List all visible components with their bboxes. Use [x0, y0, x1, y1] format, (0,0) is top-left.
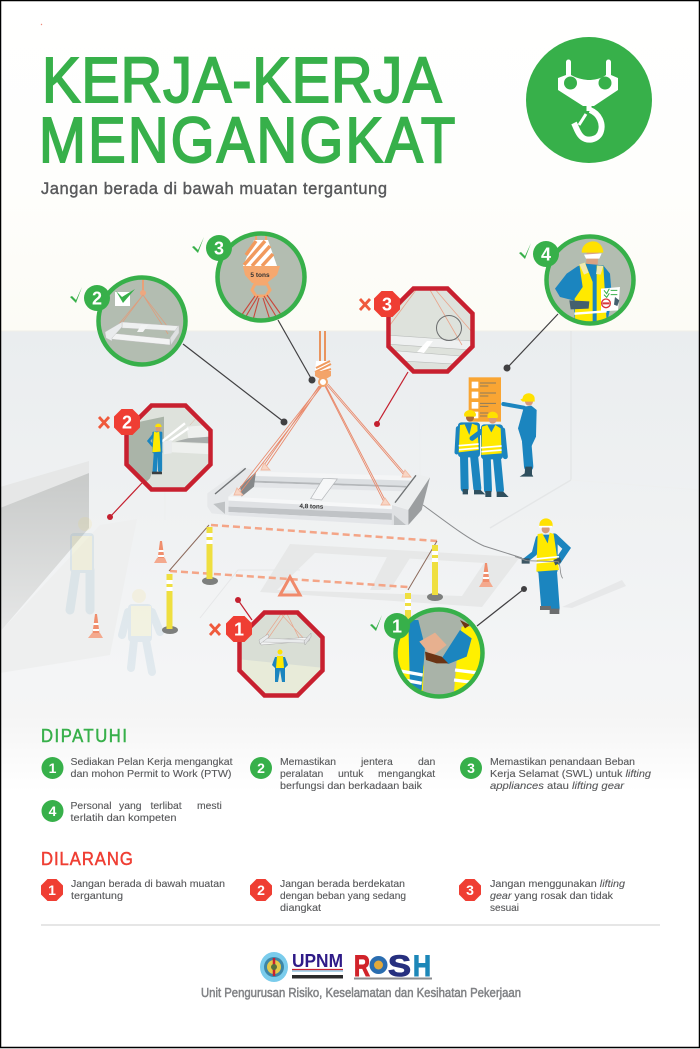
tick — [70, 287, 82, 303]
callout: green 4 — [519, 236, 634, 325]
connector: green 1 — [477, 586, 527, 626]
item: dipatuhi 3: Kerja Selamat (SWL) untuk lifting — [490, 769, 651, 780]
badge 1: 1 — [392, 616, 402, 636]
item: dilarang 1 — [41, 879, 225, 902]
item: dipatuhi 2: mengangkat — [378, 769, 435, 780]
tick — [192, 237, 204, 253]
item: dipatuhi 3: Memastikan penandaan Beban — [490, 757, 635, 768]
item: dipatuhi 4: mesti — [197, 801, 222, 812]
badge 3: 3 — [214, 238, 224, 258]
item: dilarang 1: Jangan berada di bawah muatan — [71, 879, 225, 890]
item: dilarang 2 — [250, 879, 406, 914]
item: dilarang 2: diangkat — [280, 903, 321, 914]
callout: red 1 — [210, 612, 325, 700]
load label: 4,8 tons — [299, 503, 324, 511]
callout: green 2 — [70, 276, 186, 364]
item: dilarang 3: sesuai — [490, 903, 519, 914]
item: dipatuhi 1: dan mohon Permit to Work (PTW) — [70, 769, 232, 780]
item: dipatuhi 3: appliances atau lifting gear — [490, 781, 625, 792]
callout: red 2 — [99, 406, 210, 490]
item: dilarang 3 — [459, 879, 625, 914]
item: dipatuhi 2: Memastikan — [280, 757, 336, 768]
connector: green 2 — [183, 344, 288, 426]
logo: ROSH — [354, 950, 432, 983]
item: dilarang 3: Jangan menggunakan lifting — [490, 879, 625, 890]
badge 3: 3 — [382, 294, 392, 314]
badge 2: 2 — [122, 412, 132, 432]
callout: red 3 — [360, 288, 472, 372]
connector: red 3 — [374, 372, 408, 427]
item: dilarang 3: 3 — [466, 882, 474, 898]
tick — [370, 615, 382, 631]
frame shadow on the floor — [200, 544, 626, 618]
icon: crane hook — [526, 37, 652, 163]
item: dilarang 2: 2 — [257, 882, 265, 898]
callout: green 3 — [192, 233, 304, 320]
item: dipatuhi 4: yang — [119, 801, 142, 812]
title: MENGANGKAT — [39, 104, 455, 176]
control wire — [423, 505, 522, 558]
item: dilarang 2: Jangan berada berdekatan — [280, 879, 405, 890]
title: KERJA-KERJA — [42, 44, 442, 116]
faded background workers — [70, 517, 160, 672]
cross — [360, 299, 370, 310]
left concrete block — [0, 461, 137, 673]
item: dipatuhi 2: jentera — [360, 757, 393, 768]
callout: green 1 — [370, 610, 483, 700]
logo: UPNM — [260, 951, 343, 982]
logo: ROSH: S — [388, 950, 411, 983]
tick — [519, 243, 531, 259]
item: dipatuhi 4: 4 — [49, 803, 57, 819]
item: dipatuhi 2: dan — [418, 757, 436, 768]
worker group with checklist — [457, 377, 537, 497]
bollard posts — [162, 527, 443, 634]
heading: dilarang: DILARANG — [41, 848, 133, 869]
footer text: Unit Pengurusan Risiko, Keselamatan dan Kesihatan Pekerjaan — [201, 985, 521, 1000]
item: dipatuhi 1 — [42, 757, 233, 780]
badge 4: 4 — [541, 244, 551, 264]
item: dipatuhi 4 — [42, 800, 222, 824]
title — [39, 44, 455, 176]
warning triangle — [280, 577, 300, 595]
item: dipatuhi 2: 2 — [257, 760, 265, 776]
logo: UPNM: UPNM — [292, 951, 343, 971]
traffic cones — [88, 541, 493, 638]
item: dipatuhi 1: Sediakan Pelan Kerja mengangkat — [70, 757, 233, 768]
item: dilarang 1: tergantung — [71, 891, 123, 902]
safety tape and ropes — [169, 525, 437, 590]
connector: green 4 — [504, 314, 558, 372]
item: dipatuhi 2: peralatan — [280, 769, 324, 780]
item: dipatuhi 4: Personal — [70, 801, 112, 812]
connector: green 3 — [278, 320, 316, 384]
item: dilarang 1: 1 — [48, 882, 56, 898]
subtitle: Jangan berada di bawah muatan tergantung — [41, 180, 387, 198]
item: dilarang 2: dengan beban yang sedang — [280, 891, 406, 902]
crane hook block — [315, 331, 331, 386]
badge 2: 2 — [92, 288, 102, 308]
item: dilarang 3: gear yang rosak dan tidak — [490, 891, 614, 902]
item: dipatuhi 3: 3 — [467, 760, 475, 776]
main load: steel frame 4,8 tons — [207, 467, 430, 525]
logo: ROSH: H — [413, 950, 431, 983]
logo: ROSH: R — [354, 950, 370, 983]
cross — [99, 417, 109, 428]
connector: red 1 — [235, 597, 252, 620]
stray mark — [41, 24, 42, 25]
callout: green 3: 5 tons — [250, 272, 270, 279]
item: dipatuhi 1: 1 — [49, 760, 57, 776]
connector: red 2 — [107, 483, 142, 520]
badge 1: 1 — [234, 620, 244, 640]
item: dipatuhi 2: berfungsi dan berkadaan baik — [280, 781, 423, 792]
item: dipatuhi 4: terlibat — [150, 801, 182, 812]
item: dipatuhi 2 — [250, 757, 436, 792]
checkbox — [115, 289, 135, 306]
item: dipatuhi 2: untuk — [338, 769, 364, 780]
item: dipatuhi 3 — [460, 757, 651, 792]
worker with control pendant — [515, 518, 567, 614]
lifting slings — [234, 384, 411, 505]
cross — [210, 624, 220, 635]
item: dipatuhi 4: terlatih dan kompeten — [70, 813, 177, 824]
heading: dipatuhi: DIPATUHI — [41, 725, 127, 746]
